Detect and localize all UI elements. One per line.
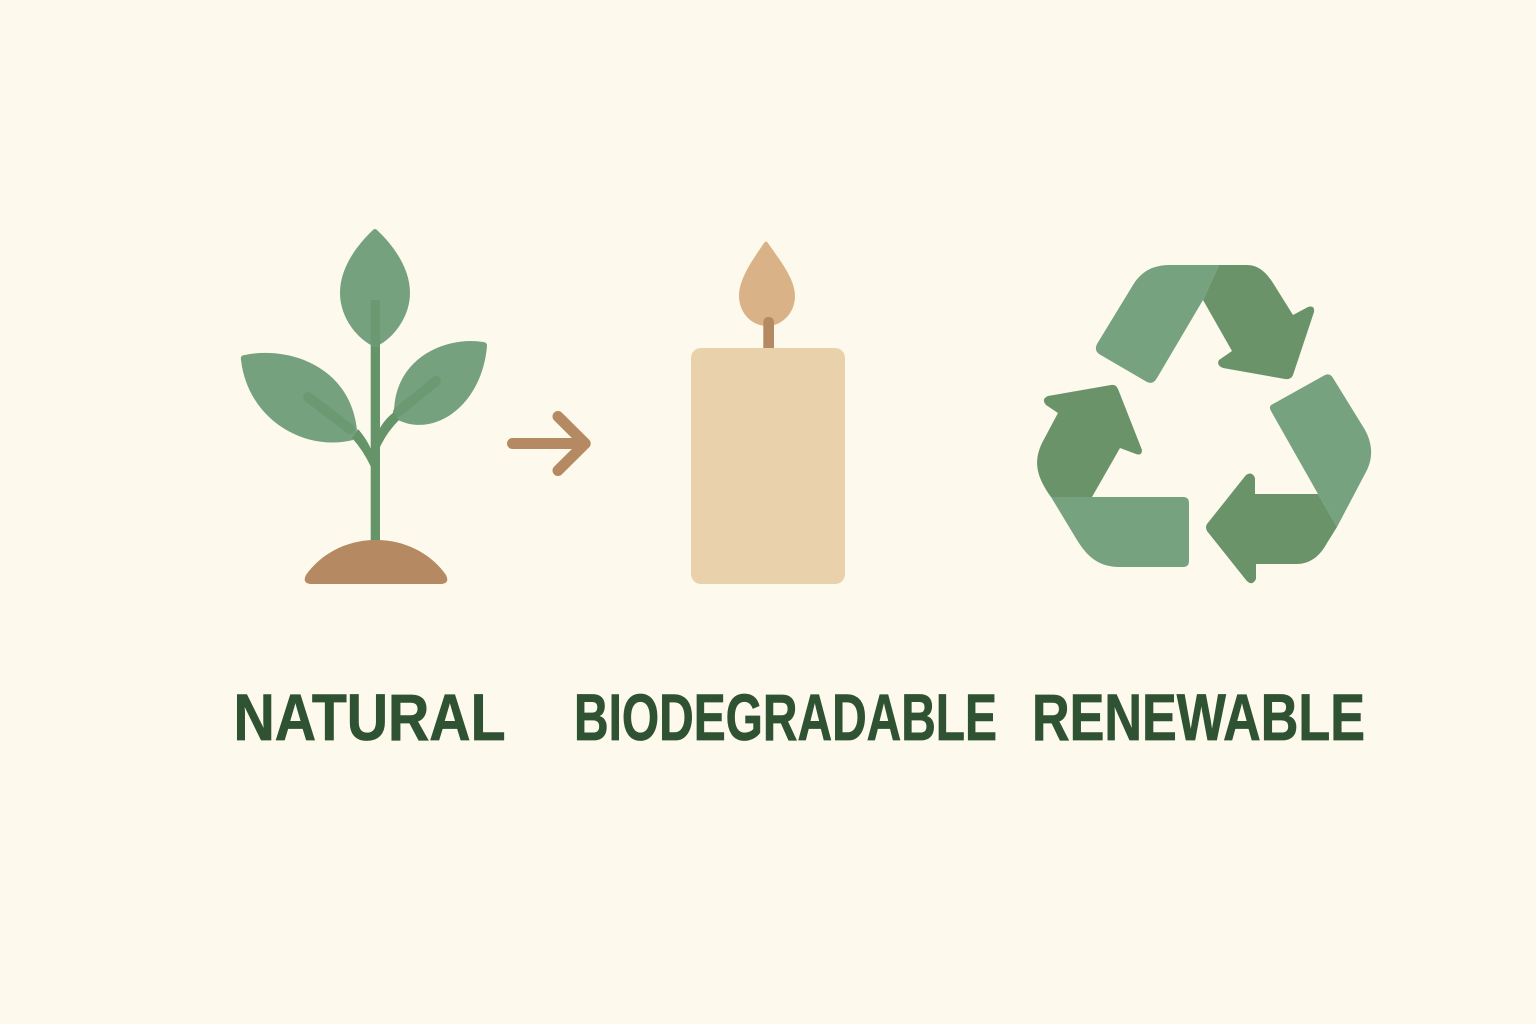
left arrow [1037,385,1189,567]
candle body [691,348,845,584]
icon: candle [691,242,845,584]
soil mound [305,540,447,584]
icon: recycling symbol [1037,265,1371,583]
leaf veins [371,300,380,347]
flame [739,242,795,326]
top leaf [340,229,410,347]
right leaf [394,341,487,425]
stem [371,347,380,542]
top arrow [1096,265,1314,383]
label: biodegradable: BIODEGRADABLE [574,680,997,754]
label: renewable: RENEWABLE [1032,680,1365,754]
label: natural: NATURAL [234,680,506,754]
left leaf [241,353,357,442]
wick [763,317,774,350]
icon: plant sprout in soil [241,229,487,584]
arrow: plant to candle [512,416,585,470]
right arrow [1206,374,1371,583]
branches [352,412,399,467]
